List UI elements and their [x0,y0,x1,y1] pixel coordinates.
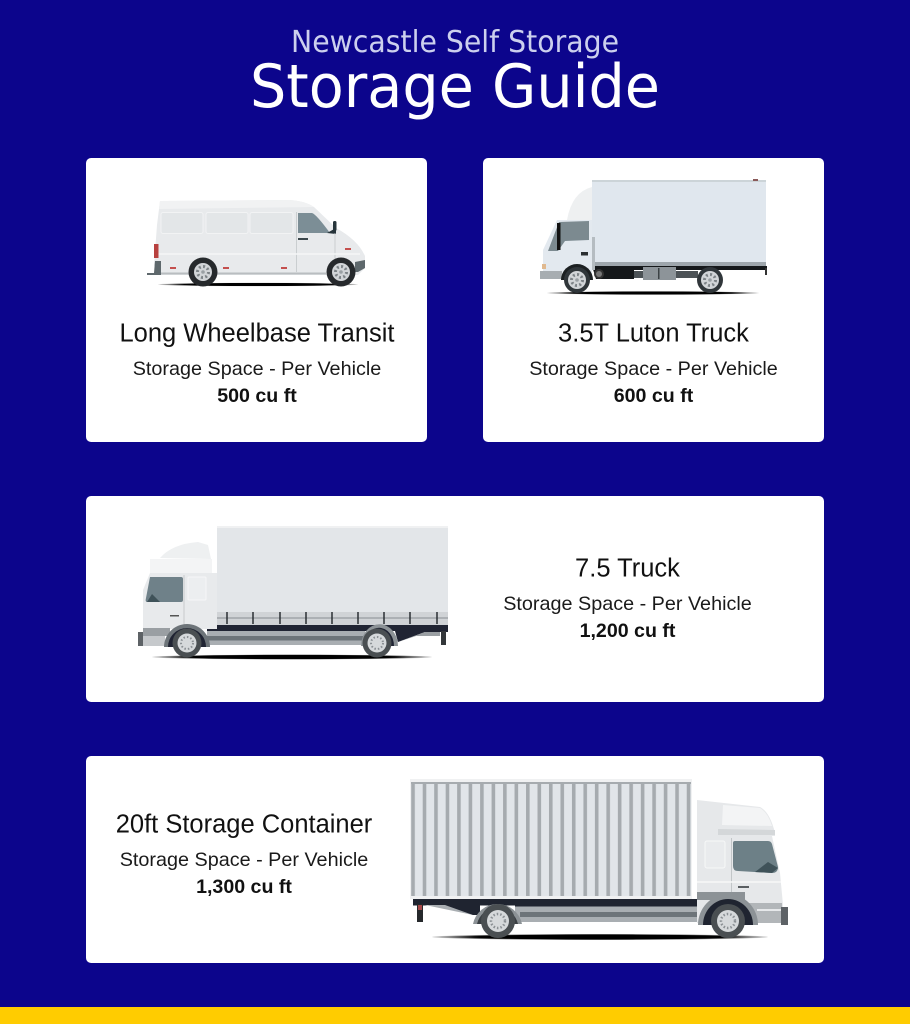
value: 500 cu ft: 500 cu ft [217,385,297,407]
subtitle: Newcastle Self Storage: Newcastle Self Storage [291,25,619,60]
label: 20ft Storage Container: 20ft Storage Container [116,810,373,838]
front wheel [172,628,202,658]
label: Storage Space per vehicle: Storage Space - Per Vehicle [120,849,368,871]
panel: 7.5 Truck [86,496,824,702]
rear wheel [362,628,392,658]
label: Storage Space per vehicle: Storage Space - Per Vehicle [529,358,778,380]
label: Long Wheelbase Transit: Long Wheelbase Transit [120,320,394,348]
icon: Luton truck [540,179,767,295]
title [250,25,660,122]
rear wheel [697,267,723,293]
value: 1,300 cu ft: 1,300 cu ft [196,876,292,898]
icon: container truck [410,779,788,940]
panel: 20ft Storage Container [86,756,824,963]
label: Storage Space per vehicle: Storage Space - Per Vehicle [133,358,381,380]
front wheel [711,904,745,938]
label: 7.5 Truck: 7.5 Truck [575,554,680,582]
heading: Storage Guide: Storage Guide [250,52,660,122]
icon: white van [147,200,365,286]
panel: 3.5T Luton Truck [483,158,824,442]
icon: 7.5 truck [138,526,448,660]
label: 3.5T Luton Truck: 3.5T Luton Truck [558,320,749,348]
label: Storage Space per vehicle: Storage Space - Per Vehicle [503,593,752,615]
yellow footer bar [0,1007,910,1024]
front wheel [564,267,590,293]
value: 1,200 cu ft: 1,200 cu ft [580,620,676,642]
rear wheel [188,258,218,286]
value: 600 cu ft: 600 cu ft [614,385,694,407]
panel: Long Wheelbase Transit [86,158,427,442]
rear wheel [481,904,515,938]
front wheel [326,258,356,286]
